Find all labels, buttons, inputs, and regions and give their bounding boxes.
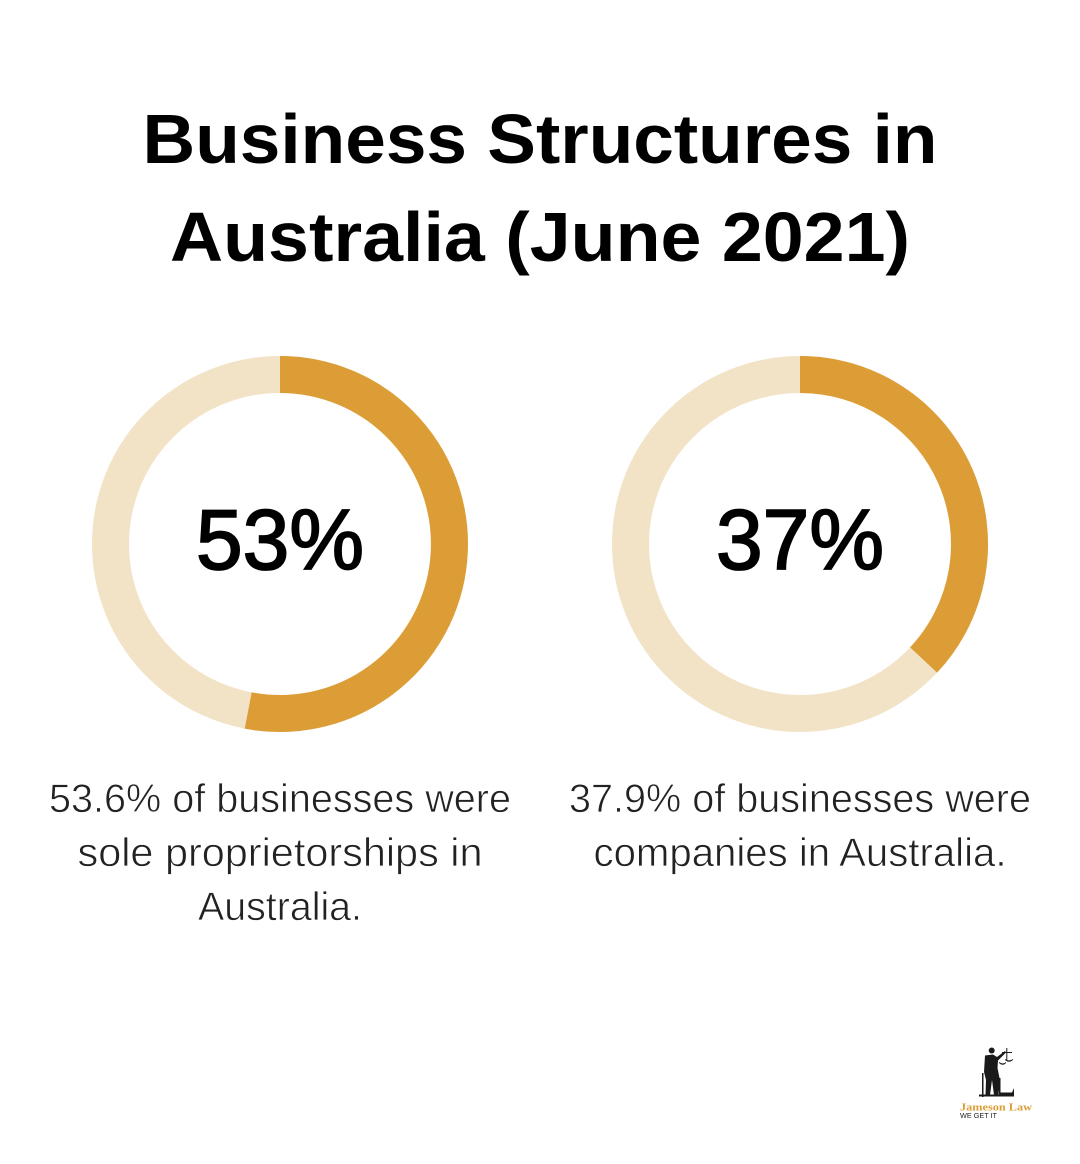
caption: companies: companies in Australia. — [594, 831, 1006, 875]
panel: companies — [569, 374, 1031, 875]
caption: sole proprietorships: Australia. — [198, 885, 362, 929]
caption: sole proprietorships: sole proprietorships in — [78, 831, 482, 875]
caption: companies: 37.9% of businesses were — [569, 777, 1031, 821]
title — [142, 100, 938, 276]
value: 37%: 37% — [716, 493, 884, 588]
logo wordmark: Jameson Law — [960, 1102, 1032, 1114]
icon: lady justice — [979, 1048, 1014, 1097]
title: Business Structures in — [142, 100, 938, 178]
value: 53%: 53% — [196, 493, 364, 588]
logo: Jameson Law — [960, 1048, 1032, 1120]
caption: companies — [569, 777, 1031, 875]
caption: sole proprietorships — [49, 777, 511, 929]
panel: sole proprietorships — [49, 374, 511, 929]
donut chart: 53% — [110, 374, 450, 714]
logo tagline: WE GET IT — [960, 1113, 998, 1120]
donut chart: 37% — [630, 374, 970, 714]
title: Australia (June 2021) — [170, 198, 910, 276]
caption: sole proprietorships: 53.6% of businesses were — [49, 777, 511, 821]
